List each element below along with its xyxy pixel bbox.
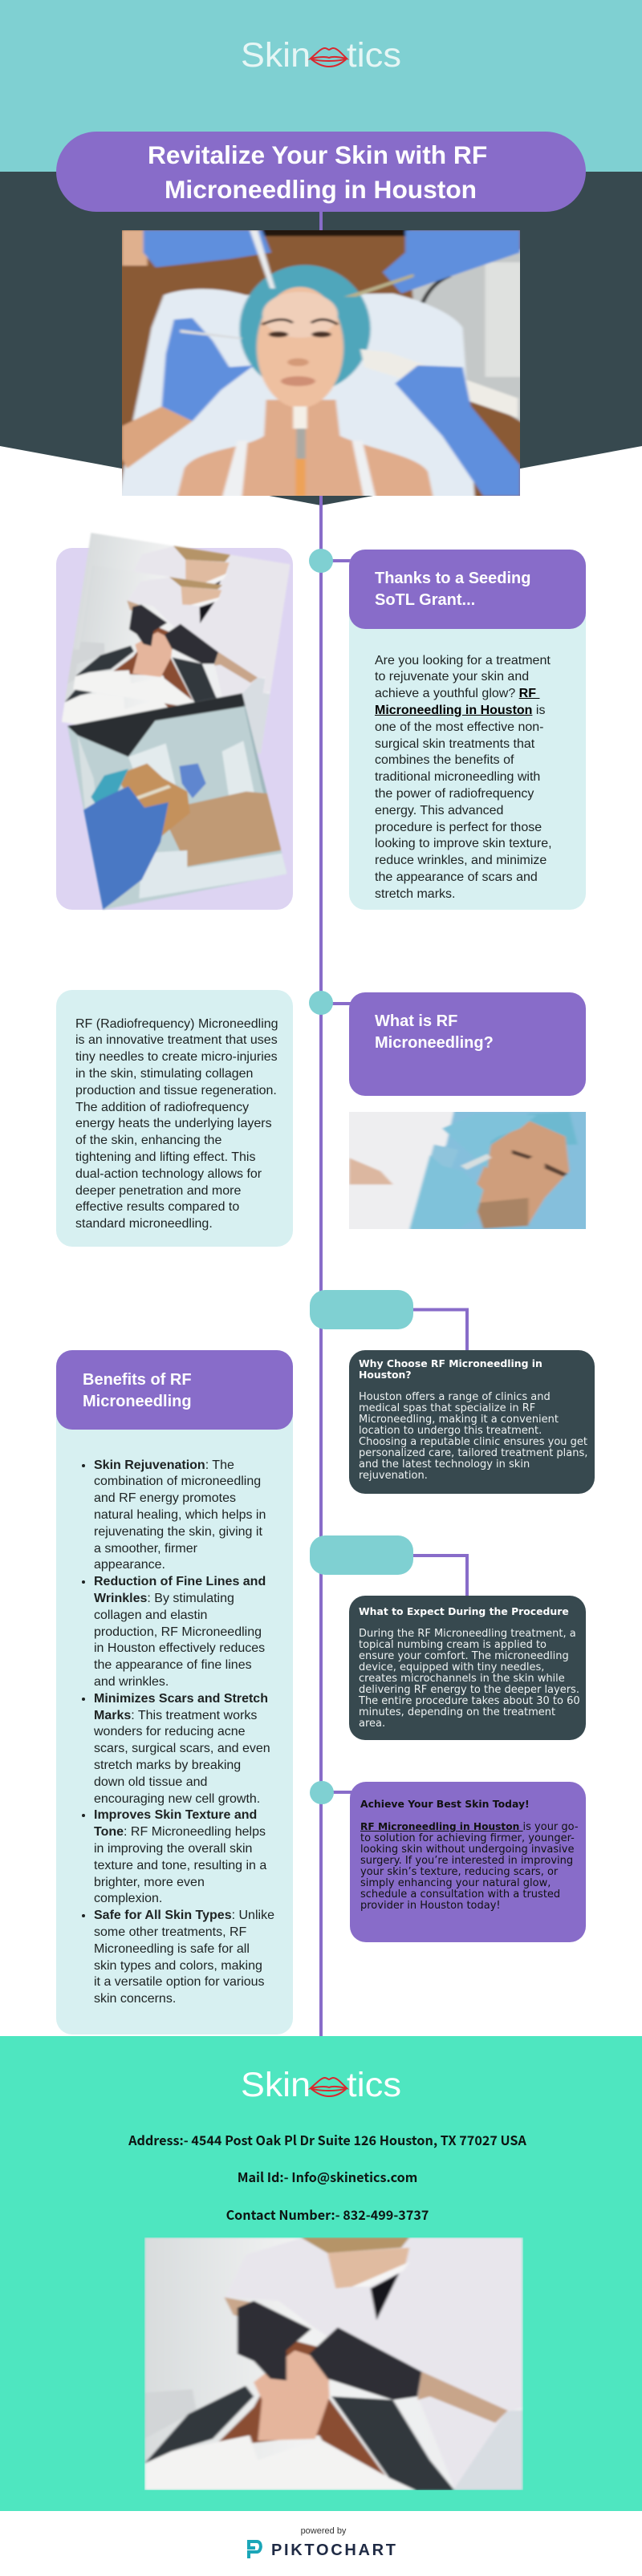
list: benefits: wonders for reducing acne (94, 1725, 246, 1738)
photo: man receiving facial injection (349, 1112, 586, 1229)
list: benefits: production, RF Microneedling (94, 1625, 262, 1639)
title text (148, 140, 487, 204)
list: benefits (82, 1458, 274, 2006)
logo: Skinetics header: tics (347, 36, 401, 75)
card text: location to undergo this treatment. (359, 1425, 542, 1437)
list: benefits: collagen and elastin (94, 1608, 207, 1622)
timeline pill (310, 1535, 413, 1575)
text: RF microneedling explanation (75, 1017, 278, 1231)
heading bar (56, 1350, 293, 1430)
list: benefits: and wrinkles. (94, 1675, 169, 1689)
text: RF microneedling explanation: standard microneedling. (75, 1217, 213, 1231)
list: benefits: Minimizes Scars and Stretch (94, 1692, 268, 1706)
card text: area. (359, 1718, 385, 1730)
text: intro paragraph: combines the benefits of (375, 753, 514, 767)
timeline dot (310, 1781, 334, 1804)
photo: doctor treating patient (144, 2237, 523, 2490)
text: RF microneedling explanation: tightening and lifting effect. This (75, 1150, 255, 1164)
card heading: What to Expect During the Procedure (359, 1605, 569, 1617)
text: RF microneedling explanation: dual-action technology allows for (75, 1167, 262, 1181)
title text: Revitalize Your Skin with RF (148, 140, 487, 169)
list: benefits: rejuvenating the skin, giving it (94, 1525, 262, 1539)
connector: dot to final card (331, 1791, 351, 1794)
heading: Thanks to a Seeding SoTL Grant: SoTL Grant... (375, 590, 475, 608)
panel: what is RF microneedling text (56, 990, 293, 1247)
panel: intro card (349, 549, 586, 910)
list: benefits: it a versatile option for various (94, 1975, 265, 1989)
list: benefits: encouraging new cell growth. (94, 1792, 260, 1806)
text: RF microneedling explanation: deeper penetration and more (75, 1184, 241, 1198)
timeline spine (319, 209, 323, 2036)
text: intro paragraph: the appearance of scars and (375, 870, 538, 884)
list: benefits: appearance. (94, 1558, 165, 1572)
list: benefits: the appearance of fine lines (94, 1658, 252, 1672)
timeline pill (310, 1290, 413, 1329)
connector: pill to why-choose card (413, 1308, 469, 1350)
card text: personalized care, tailored treatment plans, (359, 1447, 587, 1459)
logo: Skinetics footer (241, 2066, 401, 2104)
logo: Skinetics header (241, 36, 401, 75)
heading text: Microneedling? (375, 1033, 494, 1051)
text: intro paragraph: the power of radiofrequency (375, 787, 534, 801)
photo collage: two tilted treatment photos (61, 533, 291, 911)
card text: The entire procedure takes about 30 to 60 (359, 1695, 580, 1707)
heading text (375, 1012, 494, 1051)
list: benefits: texture and tone, resulting in a (94, 1859, 266, 1872)
intro heading bar (349, 549, 586, 629)
text: RF microneedling explanation: effective results compared to (75, 1200, 239, 1214)
text: intro paragraph: to rejuvenate your skin and (375, 670, 529, 684)
text: intro paragraph: surgical skin treatments that (375, 737, 534, 751)
text: RF microneedling explanation: is an innovative treatment that uses (75, 1033, 278, 1047)
title banner (56, 132, 586, 212)
card text: During the RF Microneedling treatment, a (359, 1628, 576, 1640)
credit: powered by: powered by (301, 2526, 346, 2536)
list: benefits: a smoother, firmer (94, 1542, 197, 1556)
text: RF microneedling explanation: RF (Radiofrequency) Microneedling (75, 1017, 278, 1031)
list: benefits: Tone: RF Microneedling helps (94, 1825, 266, 1839)
card heading: Houston? (359, 1369, 412, 1381)
text: intro paragraph: Are you looking for a treatment (375, 654, 551, 667)
list: benefits: Wrinkles: By stimulating (94, 1592, 234, 1605)
card: Achieve Your Best Skin Today (350, 1781, 586, 1942)
list: benefits: in Houston effectively reduces (94, 1641, 265, 1655)
card heading: Achieve Your Best Skin Today! (360, 1798, 530, 1810)
list: benefits: Skin Rejuvenation: The (94, 1458, 234, 1472)
timeline dot (309, 991, 333, 1015)
contact: mail: Mail Id:- Info@skinetics.com (238, 2167, 417, 2186)
text: intro paragraph: one of the most effective non- (375, 720, 544, 734)
list: benefits: Microneedling is safe for all (94, 1942, 250, 1956)
text: RF microneedling explanation: in the skin, stimulating collagen (75, 1067, 253, 1081)
logo: Skinetics footer: Skin (241, 2066, 311, 2104)
card text: looking skin without undergoing invasive (360, 1844, 574, 1856)
footer band (0, 2036, 642, 2511)
card text: provider in Houston today! (360, 1900, 501, 1912)
card: Why Choose RF Microneedling in Houston (349, 1350, 595, 1494)
text: intro paragraph: procedure is perfect for those (375, 821, 542, 834)
card heading: Why Choose RF Microneedling in (359, 1357, 542, 1369)
heading: Thanks to a Seeding SoTL Grant: Thanks to a Seeding (375, 570, 530, 587)
card text: Choosing a reputable clinic ensures you get (359, 1436, 587, 1448)
text: RF microneedling explanation: energy heats the underlying layers (75, 1117, 272, 1130)
text: intro paragraph: Microneedling in Houston is (375, 704, 545, 717)
list: benefits: combination of microneedling (94, 1475, 261, 1488)
list: benefits: and RF energy promotes (94, 1491, 236, 1505)
list: benefits: in improving the overall skin (94, 1842, 252, 1856)
list: benefits: some other treatments, RF (94, 1925, 246, 1939)
card text: Houston offers a range of clinics and (359, 1391, 551, 1403)
header background band (0, 0, 642, 505)
logo: Skinetics header: Skin (241, 36, 311, 75)
connector: dot to grant card (331, 559, 351, 562)
card: What to Expect During the Procedure (349, 1596, 586, 1739)
card text: ensure your comfort. The microneedling (359, 1650, 569, 1662)
text: intro paragraph: reduce wrinkles, and minimize (375, 854, 547, 867)
card text: delivering RF energy to the deeper layers. (359, 1684, 579, 1696)
card text (360, 1821, 579, 1912)
list: benefits: Reduction of Fine Lines and (94, 1575, 266, 1588)
card text: schedule a consultation with a trusted (360, 1888, 560, 1901)
card text: surgery. If you’re interested in improving (360, 1855, 573, 1867)
list: benefits: Marks: This treatment works (94, 1709, 257, 1722)
card text: rejuvenation. (359, 1470, 428, 1482)
list: benefits: down old tissue and (94, 1775, 207, 1789)
card text (358, 1628, 580, 1730)
card text: Microneedling, making it a convenient (359, 1414, 559, 1426)
logo: Piktochart: PIKTOCHART (271, 2542, 396, 2559)
list: benefits: brighter, more even (94, 1876, 205, 1889)
text: RF microneedling explanation: production and tissue regeneration. (75, 1084, 277, 1097)
heading: Benefits of RF Microneedling: Microneedling (83, 1393, 192, 1410)
heading text: What is RF (375, 1012, 457, 1030)
heading card: What is RF Microneedling (349, 992, 586, 1096)
timeline dot (309, 549, 333, 573)
list: benefits: Safe for All Skin Types: Unlike (94, 1909, 274, 1922)
text: intro paragraph: stretch marks. (375, 887, 455, 901)
text: RF microneedling explanation: The addition of radiofrequency (75, 1101, 249, 1114)
heading: Benefits of RF Microneedling (83, 1370, 192, 1410)
list: benefits: skin types and colors, making (94, 1959, 262, 1972)
connector: pill to procedure card (413, 1554, 469, 1596)
logo: Skinetics footer: tics (347, 2066, 401, 2104)
card text: medical spas that specialize in RF (359, 1402, 535, 1414)
list: benefits: natural healing, which helps in (94, 1508, 266, 1522)
list: benefits: complexion. (94, 1892, 162, 1905)
text: intro paragraph: traditional microneedling with (375, 770, 540, 784)
list: benefits: Improves Skin Texture and (94, 1808, 257, 1822)
card text: simply enhancing your natural glow, (360, 1877, 551, 1889)
list: benefits: scars, surgical scars, and even (94, 1742, 270, 1755)
card text: minutes, depending on the treatment (359, 1706, 555, 1718)
card text: your skin’s texture, reducing scars, or (360, 1866, 558, 1878)
card text: and the latest technology in skin (359, 1458, 530, 1471)
text: intro paragraph (375, 654, 552, 901)
panel: collage background (56, 547, 293, 910)
contact: phone: Contact Number:- 832-499-3737 (226, 2205, 429, 2224)
contact: address: Address:- 4544 Post Oak Pl Dr Suite 126 Houston, TX 77027 USA (128, 2130, 526, 2149)
heading card: Benefits (56, 1350, 293, 2034)
card text (359, 1391, 587, 1482)
card heading (359, 1357, 542, 1381)
card text: creates microchannels in the skin while (359, 1673, 565, 1685)
heading: Benefits of RF Microneedling: Benefits of RF (83, 1370, 192, 1388)
card text: device, equipped with tiny needles, (359, 1661, 544, 1673)
text: intro paragraph: achieve a youthful glow? RF (375, 687, 536, 700)
hero photo: woman with gloved hands around her face (122, 230, 520, 496)
title text: Microneedling in Houston (165, 175, 477, 204)
text: intro paragraph: looking to improve skin texture, (375, 837, 552, 850)
text: RF microneedling explanation: tiny needles to create micro-injuries (75, 1050, 278, 1064)
text: intro paragraph: energy. This advanced (375, 804, 503, 817)
card text: to solution for achieving firmer, younger- (360, 1832, 575, 1844)
connector: dot to what-is heading (331, 1002, 351, 1005)
heading: Thanks to a Seeding SoTL Grant (375, 570, 530, 608)
card text: topical numbing cream is applied to (359, 1639, 547, 1651)
list: benefits: stretch marks by breaking (94, 1759, 241, 1772)
text: RF microneedling explanation: of the skin, enhancing the (75, 1134, 221, 1147)
list: benefits: skin concerns. (94, 1992, 176, 2006)
card text: RF Microneedling in Houston is your go- (360, 1821, 579, 1833)
